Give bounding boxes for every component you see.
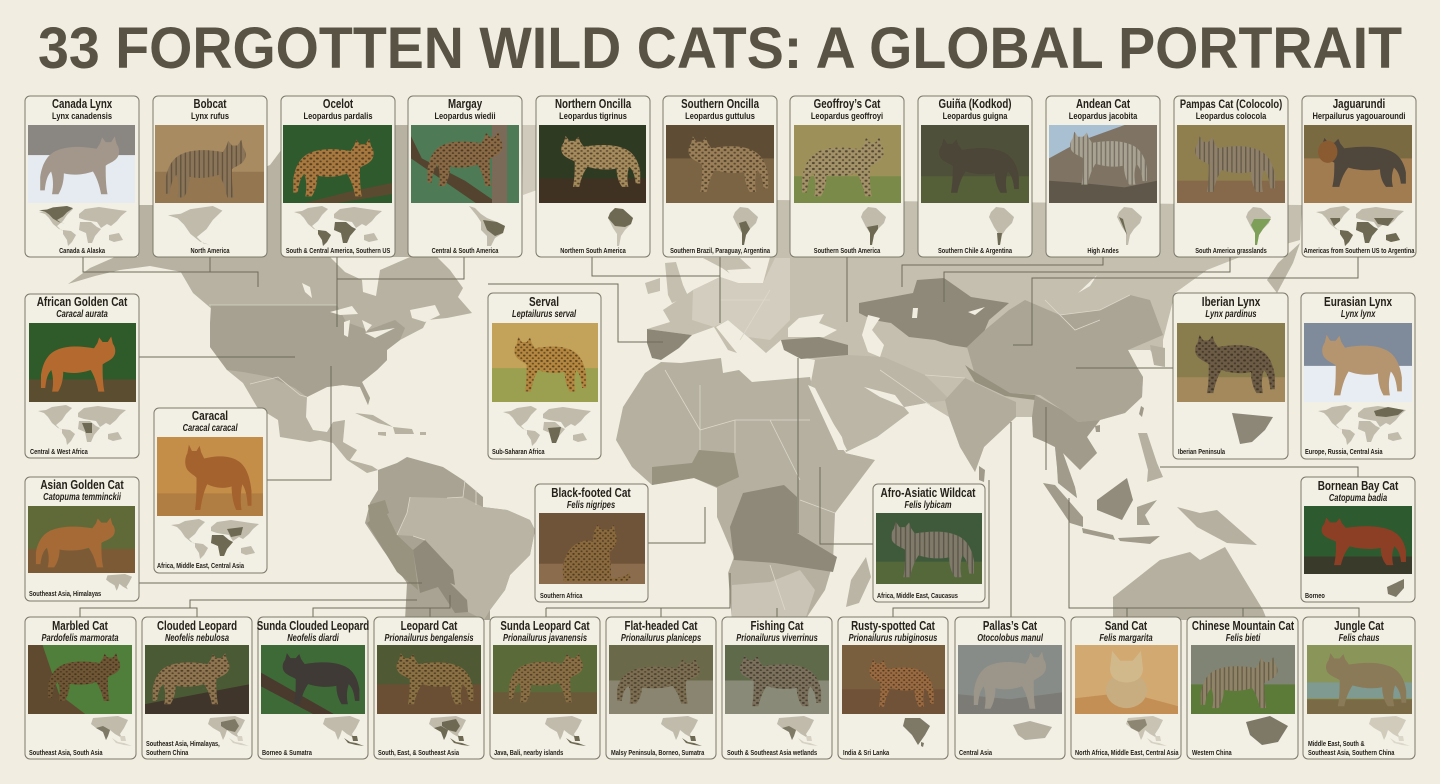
- range label: Europe, Russia, Central Asia: [1305, 448, 1383, 456]
- photo: Pallas's cat on rocks: [958, 645, 1062, 714]
- range map: [429, 716, 470, 746]
- panel: Afro-Asiatic Wildcat: [873, 484, 985, 602]
- photo: serval in tall grass: [492, 323, 598, 402]
- panel: Chinese Mountain Cat: [1187, 617, 1298, 759]
- panel: Fishing Cat: [722, 617, 832, 759]
- name: Sunda Clouded Leopard: [257, 620, 369, 633]
- name: Leopard Cat: [401, 620, 458, 633]
- map: Eurasia: [647, 200, 1302, 498]
- name: Marbled Cat: [52, 620, 108, 633]
- range label: Africa, Middle East, Central Asia: [157, 562, 244, 570]
- range label: Malsy Peninsula, Borneo, Sumatra: [611, 749, 705, 757]
- range label: South America grasslands: [1195, 247, 1267, 255]
- photo: ocelot on branch: [283, 125, 392, 203]
- map: Philippines: [1138, 433, 1163, 482]
- range label: Sub-Saharan Africa: [492, 448, 545, 456]
- photo: margay on branch: [411, 125, 519, 203]
- range label: North America: [191, 247, 230, 255]
- scientific name: Felis margarita: [1099, 632, 1153, 643]
- name: Bobcat: [194, 98, 227, 111]
- scientific name: Herpailurus yagouaroundi: [1312, 110, 1406, 121]
- photo: southern oncilla: [666, 125, 774, 203]
- scientific name: Catopuma badia: [1329, 492, 1387, 503]
- photo: Chinese mountain cat: [1191, 645, 1295, 714]
- panel: Marbled Cat: [25, 617, 136, 759]
- map: Southeast Asia: [1032, 395, 1100, 498]
- scientific name: Leopardus colocola: [1196, 110, 1267, 121]
- range map: [39, 206, 127, 246]
- map: Borneo: [1097, 478, 1133, 520]
- scientific name: Leopardus guigna: [943, 110, 1008, 121]
- map: West Africa: [652, 450, 739, 487]
- range map: [294, 206, 382, 246]
- range map: Western China: [1246, 716, 1288, 745]
- photo: jungle cat: [1307, 645, 1412, 714]
- scientific name: Lynx pardinus: [1205, 308, 1257, 319]
- name: Guiña (Kodkod): [939, 98, 1012, 111]
- scientific name: Felis bieti: [1226, 632, 1261, 643]
- scientific name: Prionailurus planiceps: [621, 632, 701, 643]
- photo: Afro-Asiatic wildcat: [876, 513, 982, 584]
- scientific name: Lynx canadensis: [52, 110, 112, 121]
- map: Brazil: [397, 497, 535, 620]
- photo: Bornean bay cat: [1304, 506, 1412, 574]
- scientific name: Caracal aurata: [56, 308, 108, 319]
- name: Pampas Cat (Colocolo): [1180, 98, 1283, 111]
- photo: marbled cat on trunk: [28, 645, 132, 714]
- scientific name: Neofelis diardi: [287, 632, 339, 643]
- range map: Borneo: [1387, 579, 1404, 597]
- range label: Central & South America: [432, 247, 499, 255]
- panel: Iberian Lynx: [1173, 293, 1288, 459]
- panel: Asian Golden Cat: [25, 477, 139, 601]
- scientific name: Leptailurus serval: [512, 308, 577, 319]
- name: Caracal: [192, 409, 228, 423]
- panel: Pampas Cat: [1174, 96, 1288, 257]
- name: Geoffroy’s Cat: [814, 98, 881, 111]
- range map: [323, 716, 364, 746]
- range label: Southern South America: [814, 247, 881, 255]
- world map: [68, 125, 1302, 620]
- range label: Central Asia: [959, 749, 992, 757]
- range label: Southern Brazil, Paraguay, Argentina: [670, 247, 770, 255]
- photo: Canada lynx in snow: [28, 125, 135, 203]
- map: Peru and Ecuador: [367, 500, 418, 590]
- panel: Guiña: [918, 96, 1032, 257]
- range map: [661, 716, 702, 746]
- photo: Asian golden cat: [28, 506, 135, 573]
- map: Madagascar: [846, 557, 871, 607]
- photo: bobcat on dry ground: [155, 125, 264, 203]
- map: Scandinavia: [703, 258, 753, 277]
- range map: [503, 406, 591, 446]
- photo: guiña: [921, 125, 1029, 203]
- panel: Bobcat: [153, 96, 267, 257]
- photo: leopard cat: [377, 645, 481, 714]
- range map: Iberian Peninsula: [1232, 413, 1273, 444]
- scientific name: Prionailurus bengalensis: [384, 632, 474, 643]
- scientific name: Prionailurus viverrinus: [736, 632, 818, 643]
- photo: Pampas cat: [1177, 125, 1285, 203]
- range label: Southeast Asia, South Asia: [29, 749, 103, 757]
- name: Bornean Bay Cat: [1318, 479, 1398, 493]
- range label: Java, Bali, nearby islands: [494, 749, 564, 757]
- panel: Eurasian Lynx: [1301, 293, 1415, 459]
- map: Java: [1082, 528, 1160, 544]
- range label: Middle East, South &: [1308, 740, 1365, 748]
- map: Europe west: [692, 258, 790, 340]
- map: Australia: [1113, 547, 1267, 620]
- scientific name: Lynx rufus: [191, 110, 229, 121]
- name: Asian Golden Cat: [40, 478, 124, 492]
- scientific name: Felis nigripes: [567, 499, 615, 510]
- map: Africa: [616, 358, 875, 620]
- name: African Golden Cat: [37, 295, 127, 309]
- name: Iberian Lynx: [1202, 295, 1261, 309]
- panel: Sunda Leopard Cat: [490, 617, 600, 759]
- panel: Pallas's Cat: [955, 617, 1065, 759]
- photo: caracal: [157, 437, 263, 516]
- range label: High Andes: [1087, 247, 1119, 255]
- scientific name: Neofelis nebulosa: [165, 632, 229, 643]
- map: China: [967, 295, 1163, 422]
- name: Sunda Leopard Cat: [500, 620, 590, 633]
- range map: [91, 716, 132, 746]
- panel: Geoffroy's Cat: [790, 96, 904, 257]
- range map: [1246, 207, 1271, 245]
- panel: Clouded Leopard: Southern China: [146, 749, 189, 757]
- name: Jungle Cat: [1334, 620, 1384, 633]
- range map: India and Sri Lanka: [903, 718, 930, 747]
- panel: Flat-headed Cat: [606, 617, 716, 759]
- map: Canadian waters: [302, 257, 440, 338]
- scientific name: Felis chaus: [1339, 632, 1379, 643]
- range map: [1316, 206, 1404, 246]
- panel: Northern Oncilla: [536, 96, 650, 257]
- name: Fishing Cat: [751, 620, 804, 633]
- panel: Margay: [408, 96, 522, 257]
- range map: [989, 207, 1014, 245]
- photo: Andean cat on rocks: [1049, 125, 1157, 203]
- range label: Southern Africa: [540, 592, 583, 600]
- scientific name: Pardofelis marmorata: [41, 632, 119, 643]
- scientific name: Leopardus pardalis: [304, 110, 373, 121]
- range map: [777, 716, 818, 746]
- range label: Central & West Africa: [30, 448, 88, 456]
- map: India: [945, 378, 1016, 472]
- range map: [1126, 716, 1167, 746]
- panel: Clouded Leopard: [142, 617, 252, 759]
- panel: Ocelot: [281, 96, 395, 257]
- photo: sand cat on dune: [1075, 645, 1178, 714]
- range map: [861, 207, 886, 245]
- scientific name: Catopuma temminckii: [43, 491, 121, 502]
- map: South America: [365, 457, 535, 620]
- range label: Northern South America: [560, 247, 626, 255]
- photo: Sunda leopard cat: [493, 645, 597, 714]
- range map: [469, 206, 505, 246]
- map: Southern Africa: [732, 570, 815, 620]
- map: Spain: [647, 329, 692, 360]
- range map: [1117, 207, 1142, 245]
- range label: Americas from Southern US to Argentina: [1304, 247, 1415, 255]
- scientific name: Leopardus guttulus: [685, 110, 755, 121]
- name: Chinese Mountain Cat: [1192, 620, 1294, 633]
- photo: fishing cat in wetland: [725, 645, 829, 714]
- name: Margay: [448, 98, 483, 111]
- range map: [106, 574, 132, 591]
- range map: [208, 716, 249, 746]
- name: Clouded Leopard: [157, 620, 237, 633]
- photo: African golden cat: [29, 323, 136, 402]
- connector lines: [80, 257, 1359, 617]
- scientific name: Leopardus tigrinus: [559, 110, 627, 121]
- panel: Black-footed Cat: [535, 484, 648, 602]
- photo: flat-headed cat at water: [609, 645, 713, 714]
- range map: [1318, 405, 1406, 445]
- map: Caribbean islands: [355, 413, 426, 436]
- panel: Sand Cat: [1071, 617, 1181, 759]
- range label: Iberian Peninsula: [1178, 448, 1225, 456]
- map: Bolivia and Paraguay: [413, 540, 468, 613]
- name: Flat-headed Cat: [625, 620, 698, 633]
- photo: jaguarundi: [1304, 125, 1412, 203]
- panel: Bornean Bay Cat: [1301, 477, 1415, 602]
- map: New Guinea: [1177, 507, 1257, 545]
- scientific name: Otocolobus manul: [977, 632, 1043, 643]
- panel: Southern Oncilla: [663, 96, 777, 257]
- range label: Western China: [1192, 749, 1232, 757]
- scientific name: Prionailurus rubiginosus: [849, 632, 937, 643]
- range map: [608, 208, 633, 246]
- range label: Borneo & Sumatra: [262, 749, 312, 757]
- range map: [733, 207, 758, 245]
- panel: Andean Cat: [1046, 96, 1160, 257]
- name: Rusty-spotted Cat: [851, 620, 935, 633]
- map: Great Britain and Ireland: [645, 262, 688, 303]
- name: Black-footed Cat: [551, 486, 631, 500]
- panel: Rusty-spotted Cat: [838, 617, 948, 759]
- map: Korea: [1150, 345, 1165, 367]
- map: Sri Lanka and Taiwan: [979, 406, 1144, 482]
- map: Turkey: [781, 337, 848, 359]
- name: Canada Lynx: [52, 98, 113, 111]
- name: Afro-Asiatic Wildcat: [881, 486, 976, 500]
- photo: rusty-spotted cat: [842, 645, 945, 714]
- range label: North Africa, Middle East, Central Asia: [1075, 749, 1179, 757]
- map: Middle East: [810, 355, 950, 452]
- range map: [1369, 716, 1410, 746]
- photo: Sunda clouded leopard: [261, 645, 365, 714]
- range label: South & Central America, Southern US: [286, 247, 391, 255]
- name: Eurasian Lynx: [1324, 295, 1393, 309]
- map: Alaska peninsula: [68, 257, 182, 284]
- name: Jaguarundi: [1333, 98, 1385, 111]
- map: North America: [138, 125, 472, 473]
- range label: India & Sri Lanka: [843, 749, 889, 757]
- panel: Jungle Cat: Southeast Asia, Southern China: [1308, 749, 1395, 757]
- range label: Canada & Alaska: [59, 247, 105, 255]
- range map: Central Asia: [1013, 721, 1052, 740]
- range label: Borneo: [1305, 592, 1325, 600]
- title: 33 FORGOTTEN WILD CATS: A GLOBAL PORTRAIT: [38, 16, 1402, 81]
- range map: [38, 405, 126, 445]
- name: Southern Oncilla: [681, 98, 760, 111]
- name: Serval: [529, 295, 559, 309]
- name: Pallas’s Cat: [983, 620, 1037, 633]
- photo: Geoffroy's cat in grass: [794, 125, 901, 203]
- map: Japan: [1267, 243, 1300, 293]
- panel: Serval: [488, 293, 601, 459]
- map: seas: [727, 268, 1097, 456]
- scientific name: Caracal caracal: [183, 422, 238, 433]
- scientific name: Felis lybicam: [904, 499, 952, 510]
- map: Central Africa: [730, 485, 837, 572]
- scientific name: Prionailurus javanensis: [503, 632, 587, 643]
- range label: South & Southeast Asia wetlands: [727, 749, 817, 757]
- photo: Iberian lynx: [1177, 323, 1285, 402]
- range map: [545, 716, 586, 746]
- country borders: [209, 290, 1130, 610]
- photo: oncilla in undergrowth: [539, 125, 646, 203]
- panel: Sunda Clouded Leopard: [257, 617, 369, 759]
- photo: clouded leopard: [145, 645, 249, 714]
- range map: [168, 206, 222, 245]
- panel: African Golden Cat: [25, 294, 139, 458]
- photo: black-footed cat: [539, 513, 645, 584]
- range label: Africa, Middle East, Caucasus: [877, 592, 958, 600]
- range label: Southeast Asia, Himalayas,: [146, 740, 220, 748]
- range label: Southeast Asia, Himalayas: [29, 590, 101, 598]
- map: Himalaya band: [965, 365, 1035, 400]
- scientific name: Leopardus geoffroyi: [811, 110, 883, 121]
- name: Sand Cat: [1105, 620, 1147, 633]
- map: Sulawesi: [1137, 500, 1157, 525]
- scientific name: Leopardus jacobita: [1069, 110, 1137, 121]
- map: USA: [210, 305, 405, 405]
- range map: [171, 519, 259, 559]
- scientific name: Lynx lynx: [1341, 308, 1376, 319]
- range label: South, East, & Southeast Asia: [378, 749, 459, 757]
- photo: Eurasian lynx in snow: [1304, 323, 1412, 402]
- name: Ocelot: [323, 98, 353, 111]
- panel: Jaguarundi: [1302, 96, 1416, 257]
- map: Sumatra: [1043, 483, 1083, 527]
- panel: Canada Lynx: [25, 96, 139, 257]
- map: Kazakhstan and Central Asia: [859, 278, 1009, 348]
- scientific name: Leopardus wiedii: [434, 110, 496, 121]
- name: Northern Oncilla: [555, 98, 632, 111]
- panel: Leopard Cat: [374, 617, 484, 759]
- name: Andean Cat: [1076, 98, 1130, 111]
- panel: Jungle Cat: [1303, 617, 1415, 759]
- range label: Southern Chile & Argentina: [938, 247, 1012, 255]
- panel: Caracal: [154, 408, 267, 573]
- map: Greenland: [522, 125, 537, 195]
